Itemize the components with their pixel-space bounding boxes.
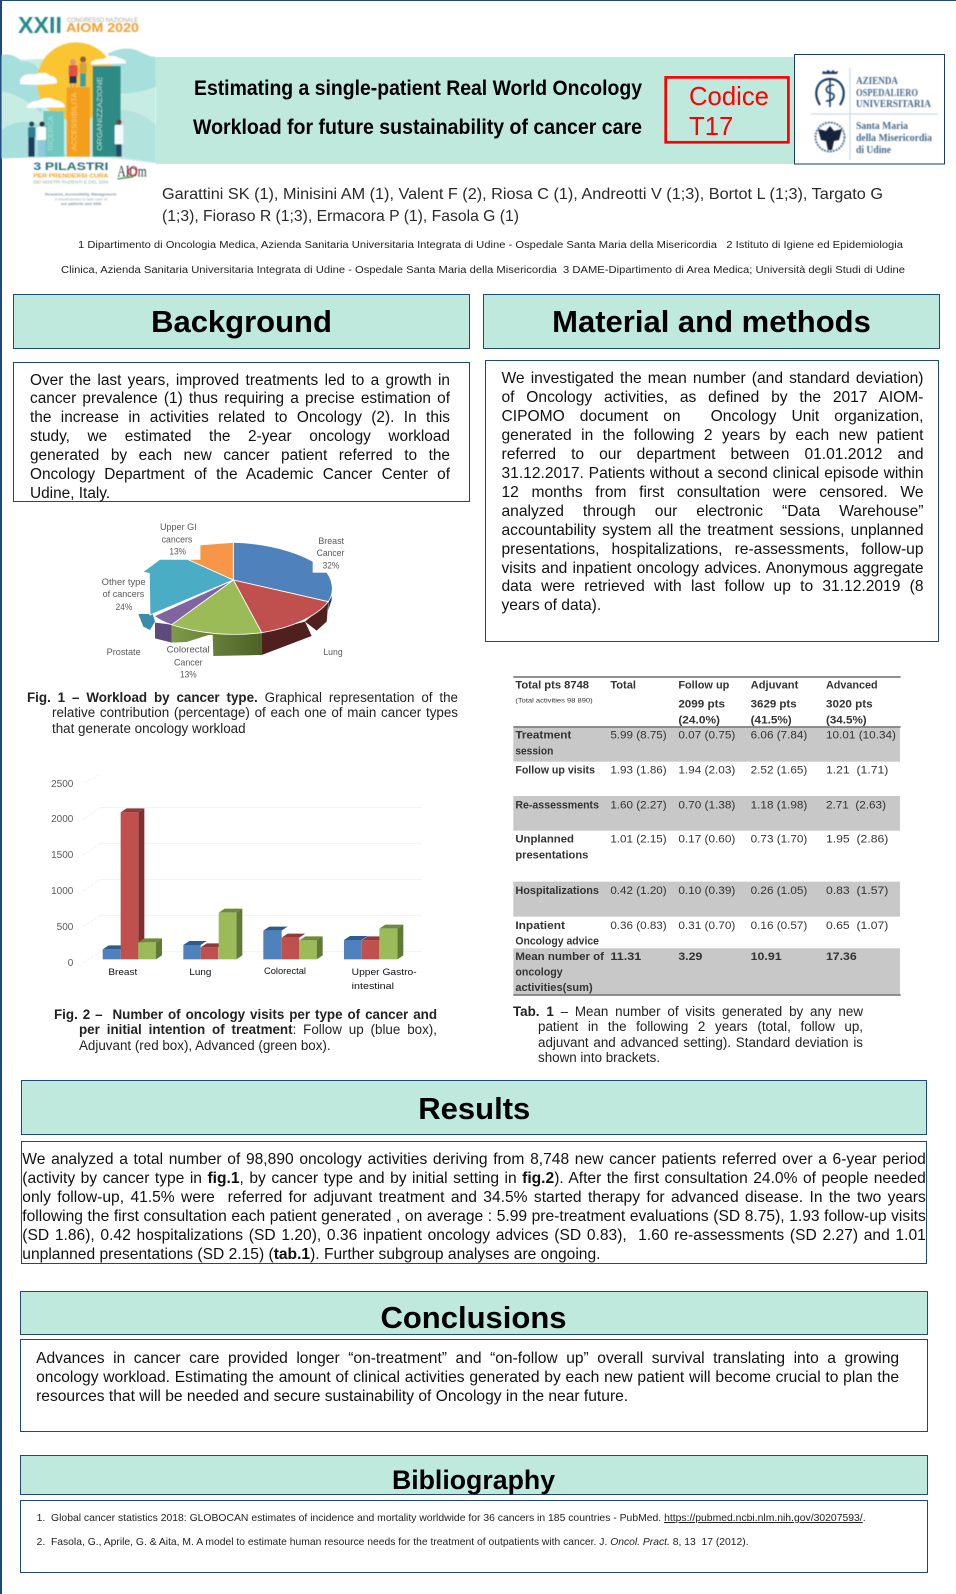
panel: background text: study, we estimated the 2-year oncology workload (30, 428, 450, 445)
panel: background text: Oncology Department of the Academic Cancer Center of (30, 466, 450, 483)
panel: conclusions text (20, 1339, 928, 1432)
table: mean number of visits: Hospitalizations (515, 885, 599, 897)
caption: table 1: shown into brackets. (538, 1050, 660, 1065)
panel: material and methods text: CIPOMO document on Oncology Unit organization, (502, 408, 924, 425)
3D bar chart: visits per cancer type and treatment intention: Lung (189, 967, 211, 977)
table: mean number of visits: presentations (515, 849, 588, 861)
panel: material and methods text: accountability system all the treatment sessions, unplanned (502, 522, 924, 539)
pie chart: workload by cancer type: Colorectal (167, 645, 210, 655)
panel: results text: only follow-up, 41.5% were referred for adjuvant treatment and 34.5% started therapy for advanced disease. In the two years (22, 1189, 926, 1206)
bars: colorectal (263, 927, 323, 959)
congress illustration: 3 pilastri: AIOM 2020 (66, 20, 139, 35)
3D bar chart: visits per cancer type and treatment intention (51, 775, 422, 991)
affiliations (61, 240, 905, 276)
heading: Background (13, 294, 470, 349)
panel: conclusions text: resources that will be needed and secure sustainability of Oncology in the near future. (36, 1388, 628, 1405)
panel: material and methods text: years of data). (502, 597, 601, 614)
3D bar chart: visits per cancer type and treatment intention: 1500 (51, 850, 74, 861)
pie chart: workload by cancer type: cancers (162, 535, 193, 545)
pie chart: workload by cancer type (102, 522, 346, 680)
panel: background text: Over the last years, improved treatments led to a growth in (30, 372, 450, 388)
caption: figure 1 (27, 690, 458, 736)
table: mean number of visits: 0.83 (1.57) (826, 885, 888, 897)
pie chart: workload by cancer type: Breast (318, 536, 344, 546)
panel: bibliography list (20, 1500, 928, 1573)
caption: figure 1: Fig. 1 – Workload by cancer type. Graphical representation of the (27, 690, 458, 705)
caption: figure 2 (54, 1007, 437, 1053)
caption: table 1: Tab. 1 – Mean number of visits generated by any new (513, 1004, 863, 1019)
table: mean number of visits: 0.26 (1.05) (751, 885, 807, 897)
3D bar chart: visits per cancer type and treatment intention: 2500 (51, 779, 74, 790)
table: mean number of visits: 3629 pts (751, 699, 797, 711)
table: mean number of visits: 0.10 (0.39) (678, 885, 735, 897)
table: mean number of visits: 0.17 (0.60) (678, 834, 735, 846)
authors (162, 186, 883, 225)
panel: conclusions text: oncology workload. Estimating the amount of clinical activities generated by each new patient will become crucial to plan the (36, 1369, 899, 1386)
table: mean number of visits: 1.60 (2.27) (610, 799, 667, 811)
authors: Garattini SK (1), Minisini AM (1), Valent F (2), Riosa C (1), Andreotti V (1;3), Bortot L (1;3), Targato G (162, 186, 883, 203)
congress illustration: 3 pilastri: ACCESSIBILITA (69, 93, 78, 151)
hospital logo box: della Misericordia (856, 133, 933, 144)
heading: Bibliography: Bibliography (392, 1465, 555, 1495)
table: mean number of visits: 2.52 (1.65) (751, 764, 807, 776)
panel: background text (13, 362, 470, 502)
table: mean number of visits: 10.91 (751, 951, 782, 963)
table: mean number of visits: 1.94 (2.03) (678, 764, 735, 776)
table: mean number of visits: Unplanned (515, 834, 574, 846)
table: mean number of visits: (41.5%) (751, 714, 792, 726)
caption: figure 2: per initial intention of treatment: Follow up (blue box), (79, 1022, 437, 1037)
panel: material and methods text: referred to our department between 01.01.2012 and (502, 446, 924, 463)
table: mean number of visits: 3020 pts (826, 699, 873, 711)
panel: bibliography list: 1. Global cancer statistics 2018: GLOBOCAN estimates of incidence and mortality worldwide for 36 cancers in 185 countries - PubMed. https://pubmed.ncbi.nlm.nih.gov/30207593/. (36, 1512, 865, 1524)
table: mean number of visits: 11.31 (610, 951, 641, 963)
table: mean number of visits: 6.06 (7.84) (751, 729, 807, 741)
pie chart: workload by cancer type: 24% (116, 602, 132, 612)
panel: results text: (SD 1.86), 0.42 hospitalizations (SD 1.20), 0.36 inpatient oncology advices (SD 0.83), 1.60 re-assessments (SD 2.27) and 1.01 (22, 1227, 926, 1244)
panel: material and methods text: presentations, hospitalizations, re-assessments, follow-up (502, 541, 924, 558)
pie chart: workload by cancer type: Prostate (107, 647, 141, 657)
table: mean number of visits: 0.31 (0.70) (678, 920, 735, 932)
table: mean number of visits: Inpatient (515, 920, 565, 932)
hospital logo box: Santa Maria (856, 121, 909, 132)
code box: Codice T17: Codice (689, 83, 769, 111)
table: mean number of visits: (34.5%) (826, 714, 867, 726)
code box: Codice T17: T17 (689, 113, 733, 141)
panel: results text: unplanned presentations (SD 2.15) (tab.1). Further subgroup analyses are ongoing. (22, 1246, 600, 1263)
caption: figure 2: Adjuvant (red box), Advanced (green box). (79, 1038, 331, 1053)
table: mean number of visits: Treatment (515, 729, 572, 741)
bars: breast (103, 808, 162, 959)
table: mean number of visits: 0.07 (0.75) (678, 729, 735, 741)
heading: Material and methods (483, 294, 940, 349)
congress illustration: 3 pilastri: our patients and SSN (61, 201, 101, 206)
heading: Results (21, 1080, 927, 1135)
hospital logo box (794, 54, 944, 164)
pie chart: workload by cancer type: Lung (323, 647, 343, 657)
3D bar chart: visits per cancer type and treatment intention: 1000 (51, 886, 74, 897)
3D bar chart: visits per cancer type and treatment intention: 0 (68, 958, 74, 969)
table: mean number of visits (513, 677, 901, 995)
congress illustration: 3 pilastri: PER PRENDERSI CURA (33, 174, 108, 180)
table: mean number of visits: Follow up (678, 679, 730, 691)
table: mean number of visits: Follow up visits (515, 764, 595, 776)
congress illustration: 3 pilastri: XXII (18, 12, 62, 38)
table: mean number of visits: 1.21 (1.71) (826, 764, 888, 776)
table: mean number of visits: 1.18 (1.98) (751, 799, 807, 811)
table: mean number of visits: Oncology advice (515, 935, 599, 947)
hospital logo box: AZIENDA (856, 76, 898, 87)
caption: figure 1: relative contribution (percentage) of each one of main cancer types (52, 705, 458, 720)
3D bar chart: visits per cancer type and treatment intention: 500 (57, 922, 74, 933)
table: mean number of visits: 1.93 (1.86) (610, 764, 667, 776)
heading: Material and methods: Material and methods (552, 304, 871, 338)
congress illustration: 3 pilastri: CONGRESSO NAZIONALE (67, 18, 138, 24)
pie chart: workload by cancer type: Upper GI (160, 522, 197, 532)
caption: table 1: adjuvant and advanced setting). Standard deviation is (538, 1035, 863, 1050)
table: mean number of visits: Advanced (826, 679, 878, 691)
table: mean number of visits: (Total activities 98 890) (515, 698, 593, 704)
congress illustration: 3 pilastri: 3 cornerstones to take care of (55, 196, 108, 201)
panel: background text: generated by each new cancer patient referred to the (30, 447, 450, 464)
hospital logo box: di Udine (856, 145, 891, 156)
panel: results text: We analyzed a total number of 98,890 oncology activities deriving from 8,748 new cancer patients referred over a 6-year period (22, 1151, 926, 1168)
table: mean number of visits: 0.16 (0.57) (751, 920, 807, 932)
table: mean number of visits: 0.65 (1.07) (826, 920, 888, 932)
panel: material and methods text: data were retrieved with last follow up to 31.12.2019 (8 (502, 578, 924, 595)
table: mean number of visits: 0.42 (1.20) (610, 885, 667, 897)
panel: bibliography list: 2. Fasola, G., Aprile, G. & Aita, M. A model to estimate human resource needs for the treatment of outpatients with cancer. J. Oncol. Pract. 8, 13 17 (2012). (36, 1536, 748, 1548)
authors: (1;3), Fioraso R (1;3), Ermacora P (1), Fasola G (1) (162, 208, 519, 225)
table: mean number of visits: 1.01 (2.15) (610, 834, 667, 846)
panel: background text: cancer prevalence (1) thus requiring a precise estimation of (30, 390, 450, 407)
congress illustration: 3 pilastri: DEI NOSTRI PAZIENTI E DEL SSN (33, 179, 108, 184)
affiliations: Clinica, Azienda Sanitaria Universitaria Integrata di Udine - Ospedale Santa Maria della Misericordia 3 DAME-Dipartimento di Area Medica; Università degli Studi di Udine (61, 265, 905, 276)
hospital logo box: OSPEDALIERO (856, 88, 918, 99)
heading: Conclusions: Conclusions (380, 1300, 566, 1334)
heading: Conclusions (20, 1291, 928, 1335)
panel: results text (21, 1141, 927, 1264)
pie chart: workload by cancer type: Cancer (317, 548, 344, 558)
bars: upper gastro-intestinal (344, 925, 403, 959)
hospital logo box: UNIVERSITARIA (856, 99, 931, 110)
table: mean number of visits: 0.36 (0.83) (610, 920, 667, 932)
table: mean number of visits: 2.71 (2.63) (826, 799, 886, 811)
3D bar chart: visits per cancer type and treatment intention: Upper Gastro- (352, 967, 417, 977)
poster title (193, 77, 642, 139)
3D bar chart: visits per cancer type and treatment intention: intestinal (352, 981, 394, 991)
poster title: Workload for future sustainability of cancer care (193, 116, 642, 139)
pie chart: workload by cancer type: Other type (102, 577, 146, 587)
table: mean number of visits: 17.36 (826, 951, 857, 963)
heading: Bibliography (20, 1455, 928, 1495)
congress illustration: 3 pilastri: Research, Accessibility, Management: (45, 192, 117, 197)
pie chart: workload by cancer type: 13% (180, 670, 197, 680)
table: mean number of visits: activities(sum) (515, 982, 593, 994)
panel: background text: the increase in activities related to Oncology (2). In this (30, 409, 450, 426)
heading: Results: Results (418, 1090, 530, 1126)
3D bar chart: visits per cancer type and treatment intention: 2000 (51, 814, 74, 825)
congress illustration: 3 pilastri: ORGANIZZAZIONE (95, 77, 104, 151)
congress illustration: 3 pilastri (2, 12, 156, 206)
table: mean number of visits: oncology (515, 967, 563, 979)
pie chart: workload by cancer type: 13% (169, 546, 186, 556)
congress illustration: 3 pilastri: RICERCA (46, 116, 55, 151)
panel: results text: following the first consultation each patient generated , on average : 5.99 pre-treatment evaluations (SD 8.75), 1.93 follow-up visits (22, 1208, 926, 1225)
caption: figure 1: that generate oncology workload (52, 721, 246, 736)
panel: material and methods text: 31.12.2017. Patients without a second clinical episode within (502, 465, 924, 482)
poster title: Estimating a single-patient Real World Oncology (194, 77, 642, 100)
panel: material and methods text: generated in the following 2 years by each new patient (502, 427, 924, 444)
affiliations: 1 Dipartimento di Oncologia Medica, Azienda Sanitaria Universitaria Integrata di Udine - Ospedale Santa Maria della Misericordia 2 Istituto di Igiene ed Epidemiologia (78, 240, 903, 251)
panel: material and methods text: visits and inpatient oncology advices. Anonymous aggregate (502, 560, 924, 577)
table: mean number of visits: 5.99 (8.75) (610, 729, 667, 741)
table: mean number of visits: Adjuvant (751, 679, 799, 691)
heading: Background: Background (151, 304, 332, 338)
table: mean number of visits: session (515, 745, 553, 757)
bars: lung (183, 909, 242, 959)
3D bar chart: visits per cancer type and treatment intention: Breast (108, 967, 138, 977)
table: mean number of visits: (24.0%) (678, 714, 721, 726)
panel: material and methods text: We investigated the mean number (and standard deviation) (502, 370, 924, 387)
pie chart: workload by cancer type: of cancers (103, 589, 145, 599)
congress illustration: 3 pilastri: 3 PILASTRI (33, 161, 108, 173)
table: mean number of visits: Re-assessments (515, 799, 599, 811)
table: mean number of visits: Mean number of (515, 951, 604, 963)
panel: material and methods text: 12 months from first consultation were censored. We (502, 484, 924, 501)
title band (156, 57, 794, 164)
panel: material and methods text: analyzed through our electronic “Data Warehouse” (502, 503, 924, 520)
table: mean number of visits: 10.01 (10.34) (826, 729, 896, 741)
table: mean number of visits: 2099 pts (678, 699, 725, 711)
panel: results text: (activity by cancer type in fig.1, by cancer type and by initial setting in fig.2). After the first consultation 24.0% of people needed (22, 1170, 926, 1187)
table: mean number of visits: Total pts 8748 (515, 679, 589, 691)
panel: material and methods text: of Oncology activities, as defined by the 2017 AIOM- (502, 389, 924, 406)
table: mean number of visits: 1.95 (2.86) (826, 834, 888, 846)
caption: table 1: patient in the following 2 years (total, follow up, (538, 1019, 863, 1034)
table: mean number of visits: 0.70 (1.38) (678, 799, 735, 811)
caption: table 1 (513, 1004, 864, 1065)
pie chart: workload by cancer type: 32% (323, 560, 339, 570)
table: mean number of visits: 0.73 (1.70) (751, 834, 807, 846)
congress illustration: 3 pilastri: AIOm (117, 164, 147, 181)
pie chart: workload by cancer type: Cancer (174, 658, 203, 668)
caption: figure 2: Fig. 2 – Number of oncology visits per type of cancer and (54, 1007, 437, 1022)
3D bar chart: visits per cancer type and treatment intention: Colorectal (264, 966, 306, 976)
panel: material and methods text (485, 360, 939, 642)
panel: background text: Udine, Italy. (30, 485, 110, 502)
code box: Codice T17 (666, 77, 788, 142)
table: mean number of visits: Total (610, 679, 636, 691)
panel: conclusions text: Advances in cancer care provided longer “on-treatment” and “on-follow up” overall survival translating into a growing (36, 1350, 899, 1367)
table: mean number of visits: 3.29 (678, 951, 702, 963)
